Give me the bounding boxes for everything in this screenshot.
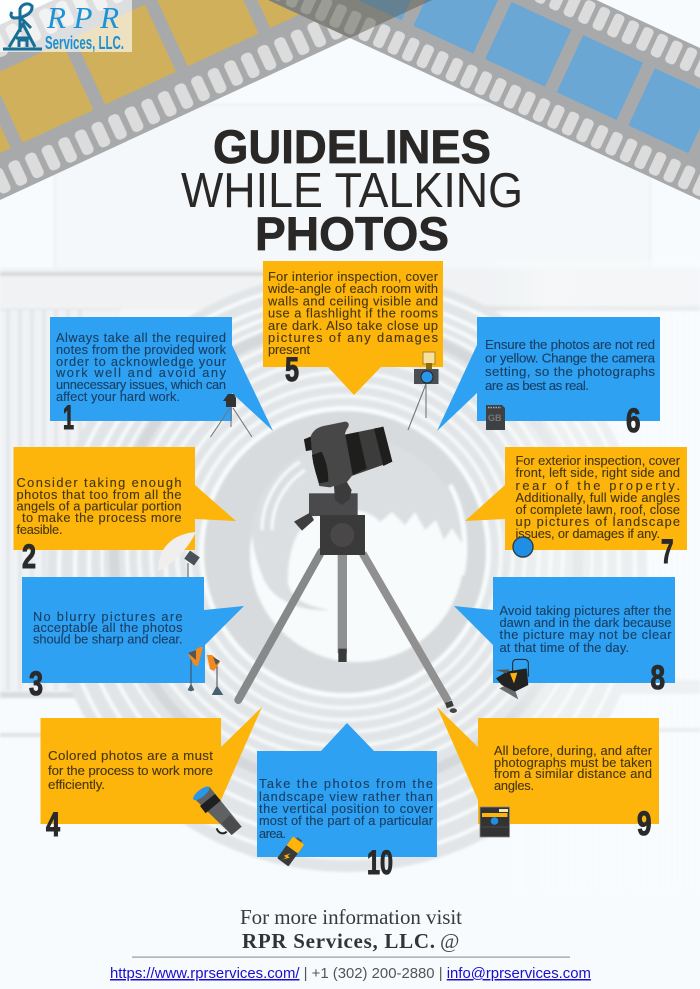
panel: tip 7: front, left side, right side and: [516, 465, 680, 480]
panel: tip 7: Additionally, full wide angles: [516, 490, 680, 505]
panel: tip 5: wide-angle of each room with: [267, 281, 438, 296]
panel: tip 1: 1: [63, 399, 74, 437]
panel: tip 10: [257, 723, 437, 882]
panel: tip 6: Ensure the photos are not red: [485, 337, 655, 352]
panel: tip 5: are dark. Also take close up: [268, 318, 438, 333]
title: WHILE TALKING: [181, 164, 523, 218]
panel: tip 5: present: [268, 342, 310, 357]
panel: tip 8: at that time of the day.: [500, 640, 629, 655]
panel: tip 1: work well and avoid any: [55, 365, 227, 380]
panel: tip 6: 6: [626, 402, 640, 440]
logo: [0, 0, 132, 53]
panel: tip 8: [454, 577, 675, 697]
panel: tip 1: affect your hard work.: [56, 389, 180, 404]
panel: tip 4: 4: [46, 806, 60, 844]
logo: RPR: [46, 0, 119, 35]
icon: blue lens circle: [513, 537, 533, 557]
panel: tip 6: setting, so the photographs: [485, 364, 655, 379]
panel: tip 1: Always take all the required: [56, 330, 226, 345]
icon: flashlight: [191, 784, 242, 835]
panel: tip 10: Take the photos from the: [259, 776, 433, 791]
icon: small tripod: [210, 394, 252, 437]
panel: tip 1: unnecessary issues, which can: [56, 377, 226, 392]
panel: tip 7: of complete lawn, roof, close: [516, 502, 680, 517]
footer text: [110, 905, 591, 982]
panel: tip 3: [22, 577, 244, 703]
film strip: left: [0, 0, 408, 229]
panel: tip 7: rear of the property.: [516, 478, 680, 493]
panel: tip 5: walls and ceiling visible and: [267, 294, 438, 309]
panel: tip 5: For interior inspection, cover: [268, 269, 439, 284]
panel: tip 5: [263, 261, 443, 395]
title: GUIDELINES: [213, 120, 491, 173]
logo: Services, LLC.: [45, 33, 124, 53]
panel: tip 3: 3: [29, 665, 43, 703]
panel: tip 5: 5: [285, 351, 299, 389]
panel: tip 6: [437, 317, 660, 440]
panel: tip 8: Avoid taking pictures after the: [500, 603, 672, 618]
panel: tip 9: angles.: [494, 778, 534, 793]
tripod legs: [238, 552, 457, 713]
panel: tip 10: the vertical position to cover: [259, 801, 434, 816]
footer text: @: [440, 929, 459, 953]
central camera on tripod: [238, 422, 457, 713]
panel: tip 9: photographs must be taken: [494, 755, 652, 770]
panel: tip 1: order to acknowledge your: [56, 354, 227, 369]
panel: tip 6: or yellow. Change the camera: [485, 351, 656, 366]
panel: tip 7: 7: [661, 533, 674, 571]
film strip overlap: [268, 0, 432, 38]
icon: softbox lights: [188, 647, 223, 695]
panel: tip 2: 2: [22, 538, 36, 576]
icon: instant camera: [480, 807, 510, 837]
footer text: RPR Services, LLC.: [242, 929, 435, 953]
panel: tip 9: [437, 707, 659, 843]
panel: tip 10: 10: [367, 844, 393, 882]
panel: tip 2: photos that too from all the: [16, 487, 182, 502]
panel: tip 1: [50, 317, 273, 437]
icon: battery: [277, 835, 305, 866]
panel: tip 3: No blurry pictures are: [33, 609, 182, 624]
icon: camera with flash on tripod: [408, 352, 438, 430]
panel: tip 1: notes from the provided work: [56, 342, 227, 357]
footer text: For more information visit: [240, 905, 462, 929]
panel: tip 10: most of the part of a particular: [259, 813, 434, 828]
panel: tip 9: All before, during, and after: [494, 743, 653, 758]
title: [181, 120, 523, 260]
icon: SD card: GB: [488, 413, 502, 423]
camera body: [304, 422, 353, 487]
icon: umbrella flash: [158, 532, 200, 578]
camera lens: [343, 427, 392, 476]
panel: tip 7: up pictures of landscape: [516, 514, 680, 529]
film strip: right: [259, 0, 700, 215]
panel: tip 4: [40, 707, 262, 844]
panel: tip 2: [14, 447, 236, 576]
title: PHOTOS: [255, 207, 449, 260]
panel: tip 10: area.: [259, 826, 286, 841]
panel: tip 2: Consider taking enough: [16, 475, 182, 490]
panel: tip 3: should be sharp and clear.: [33, 632, 182, 646]
panel: tip 9: 9: [637, 805, 652, 843]
panel: tip 4: Colored photos are a must: [48, 748, 213, 763]
icon: SD card: [486, 405, 505, 430]
panel: tip 10: landscape view rather than: [259, 789, 433, 804]
panel: tip 5: pictures of any damages: [268, 330, 438, 345]
panel: tip 2: feasible.: [16, 522, 62, 537]
panel: tip 6: are as best as real.: [485, 378, 589, 393]
panel: tip 4: for the process to work more: [48, 763, 213, 778]
panel: tip 9: from a similar distance and: [494, 766, 652, 781]
panel: tip 8: 8: [650, 659, 665, 697]
panel: tip 2: angels of a particular portion: [16, 498, 182, 514]
panel: tip 3: acceptable all the photos: [33, 620, 182, 635]
background: blurred camera lens: [0, 105, 700, 890]
panel: tip 7: For exterior inspection, cover: [516, 453, 681, 468]
footer text: https://www.rprservices.com/ | +1 (302) 200-2880 | info@rprservices.com: [110, 966, 591, 982]
panel: tip 4: efficiently.: [48, 777, 105, 792]
icon: stage spotlight: [495, 659, 528, 699]
panel: tip 8: the picture may not be clear: [500, 627, 672, 642]
tripod head: [294, 482, 365, 555]
panel: tip 7: issues, or damages if any.: [516, 526, 660, 541]
panel: tip 8: dawn and in the dark because: [500, 615, 672, 630]
panel: tip 5: use a flashlight if the rooms: [268, 306, 438, 321]
panel: tip 2: to make the process more: [22, 510, 182, 525]
panel: tip 7: [465, 447, 687, 571]
